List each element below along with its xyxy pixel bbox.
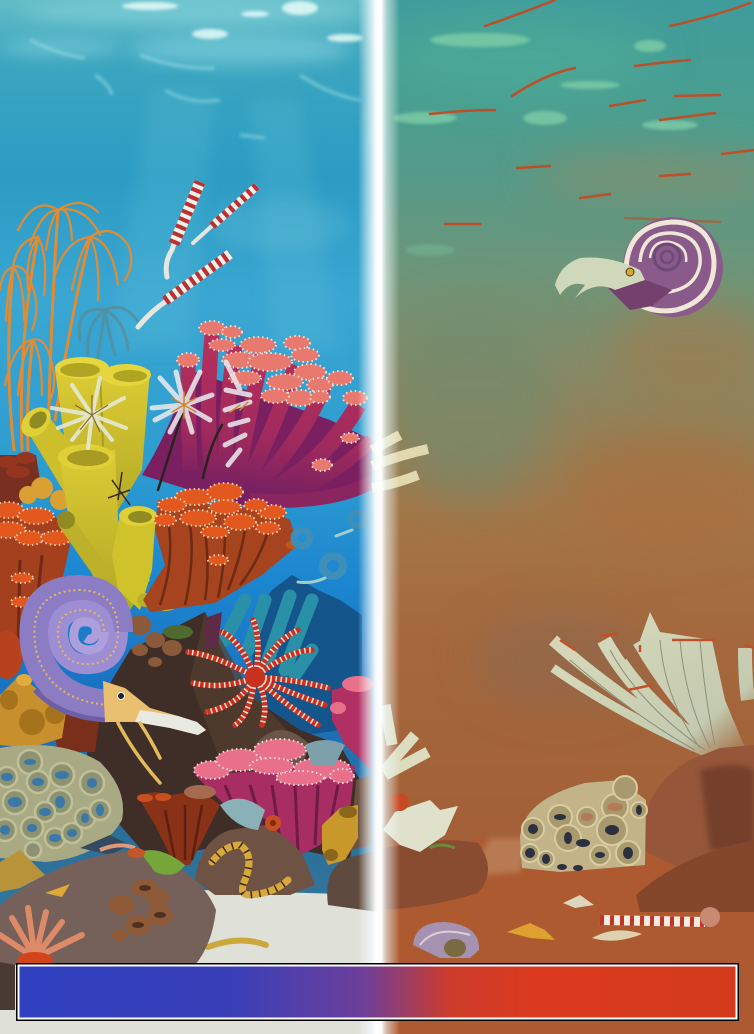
icon: purple ammonite (34, 590, 206, 783)
shell one (166, 182, 200, 277)
icon: salmon urchin (0, 908, 82, 958)
coral: bleached tube fan (553, 612, 754, 760)
shell two (193, 186, 257, 243)
coral: golden tubes lower left (0, 674, 100, 752)
coral: pink tube fan (142, 321, 428, 505)
sea floor (378, 838, 754, 1034)
icon: orange crinoids (0, 203, 140, 450)
ammonite head (103, 681, 206, 735)
rock: middle rock (195, 825, 315, 895)
teal sea fan (225, 596, 312, 675)
yellow shell cluster (0, 850, 45, 892)
coral: pink sponge by centre line and bleached tubes (330, 676, 428, 850)
red algae streaks (430, 0, 754, 224)
coral: orange tube sponge centre (143, 483, 298, 612)
coral: pink sponge lower (194, 739, 355, 858)
icon: striped ammonites swimming (138, 182, 257, 327)
coral: brain coral left (0, 745, 123, 862)
shell three (138, 254, 230, 327)
rock: brown rocks right (636, 745, 754, 912)
rock: central dark rock (85, 612, 360, 860)
sandy floor left (0, 890, 378, 1034)
icon: nautilus ammonite (555, 217, 723, 317)
icon: red feather star (188, 620, 328, 725)
icon: small blue ammonites (294, 512, 364, 582)
rock: central rock split by line (327, 793, 488, 912)
coral: yellow sponges (15, 357, 178, 611)
deep reef silhouette (250, 575, 362, 736)
icon: floor shells (413, 895, 720, 958)
panel: degraded reef water (378, 0, 754, 1034)
coral: red tubes and small yellow tubes (80, 785, 358, 865)
coral: bleached brain coral (520, 776, 647, 872)
icon: eel (208, 845, 288, 947)
centre light beam (358, 0, 400, 1034)
icon: white feather star (52, 378, 126, 448)
coral: orange tube sponge left (0, 452, 71, 679)
bleached tube ends (372, 435, 428, 488)
coral: brown sponge cluster (129, 612, 222, 667)
colour bar (16, 963, 739, 1021)
coral: white feather stars on stalks (152, 362, 250, 490)
rock: foreground left rock (0, 848, 216, 1010)
panel: healthy reef water (0, 0, 378, 1034)
